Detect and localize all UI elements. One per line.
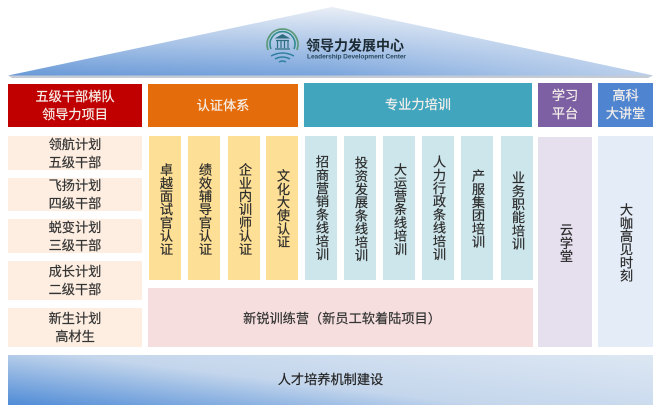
row: level four bbox=[8, 178, 142, 211]
heading: professional training: 专业力培训 bbox=[385, 97, 451, 112]
column: HR and admin line: 人力行政条线培训 bbox=[431, 155, 446, 261]
column: services group: 产服集团培训 bbox=[470, 169, 485, 248]
row: level three: 蜕变计划 bbox=[49, 220, 101, 234]
foundation: talent development mechanism: 人才培养机制建设 bbox=[278, 372, 383, 387]
panel: new employee bootcamp bbox=[148, 288, 533, 347]
column: business functions: 业务职能培训 bbox=[510, 171, 525, 250]
row: level five: 领航计划 bbox=[49, 136, 101, 152]
body: expert talks bbox=[598, 136, 653, 347]
row: level two: 成长计划 bbox=[49, 264, 101, 279]
heading: lecture hall: 大讲堂 bbox=[606, 106, 645, 121]
panel: high-tech lecture hall bbox=[598, 83, 653, 347]
column: operations line bbox=[383, 136, 415, 280]
heading: lecture hall: 高科 bbox=[612, 88, 639, 103]
column: interviewer certification bbox=[149, 136, 181, 280]
row: level five bbox=[8, 136, 142, 170]
roof with logo bbox=[8, 7, 653, 78]
row: level four: 四级干部 bbox=[49, 196, 101, 211]
heading: certification system: 认证体系 bbox=[197, 98, 249, 112]
column: internal trainer certification: 企业内训师认证 bbox=[237, 163, 252, 255]
panel: learning platform bbox=[538, 83, 592, 347]
panel: certification system bbox=[148, 84, 298, 280]
panel: professional training bbox=[304, 83, 533, 280]
column: business functions bbox=[501, 136, 533, 280]
heading: certification system bbox=[148, 84, 298, 127]
column group: certifications bbox=[149, 136, 298, 280]
column: coach certification bbox=[188, 136, 220, 280]
row: level four: 飞扬计划 bbox=[49, 178, 101, 193]
logo subtitle: Leadership Development Center bbox=[307, 54, 406, 60]
row: high-potential graduates: 新生计划 bbox=[49, 311, 101, 326]
column: services group bbox=[461, 136, 493, 280]
column: investment promotion line: 招商营销条线培训 bbox=[314, 155, 329, 261]
heading: professional training bbox=[304, 83, 532, 127]
heading: learning platform: 平台 bbox=[552, 106, 578, 121]
row: level two: 二级干部 bbox=[49, 282, 101, 297]
column: culture ambassador certification: 文化大使认证 bbox=[275, 169, 290, 248]
foundation: talent development mechanism bbox=[8, 355, 653, 405]
heading: five-level programme: 领导力项目 bbox=[42, 106, 108, 122]
icon: leadership center logo bbox=[267, 29, 298, 62]
panel: five-level leadership column bbox=[8, 84, 142, 347]
logo title: 领导力发展中心 bbox=[306, 38, 404, 54]
heading: lecture hall bbox=[598, 83, 653, 127]
column: interviewer certification: 卓越面试官认证 bbox=[158, 163, 173, 255]
row: level two bbox=[8, 261, 142, 300]
body: cloud academy: 云学堂 bbox=[558, 223, 573, 263]
column: investment development line: 投资发展条线培训 bbox=[353, 156, 368, 262]
column: internal trainer certification bbox=[228, 136, 260, 280]
panel: new employee bootcamp: 新锐训练营（新员工软着陆项目） bbox=[243, 308, 441, 326]
heading: learning platform bbox=[538, 83, 592, 127]
column: investment promotion line bbox=[305, 136, 337, 280]
body: cloud academy bbox=[538, 137, 592, 347]
row: level three: 三级干部 bbox=[49, 238, 101, 252]
heading: five-level programme: 五级干部梯队 bbox=[35, 88, 115, 104]
row: level three bbox=[8, 219, 142, 253]
column: culture ambassador certification bbox=[266, 136, 298, 280]
row: high-potential graduates: 高材生 bbox=[55, 329, 95, 344]
column: HR and admin line bbox=[422, 136, 454, 280]
row: level five: 五级干部 bbox=[49, 154, 101, 170]
heading: five-level programme bbox=[8, 84, 142, 127]
heading: learning platform: 学习 bbox=[552, 88, 578, 103]
column: investment development line bbox=[344, 136, 376, 280]
column: operations line: 大运营条线培训 bbox=[392, 163, 407, 255]
column group: training lines bbox=[305, 136, 533, 280]
row: high-potential graduates bbox=[8, 308, 142, 347]
body: expert talks: 大咖高见时刻 bbox=[618, 203, 633, 282]
column: coach certification: 绩效辅导官认证 bbox=[197, 163, 212, 255]
